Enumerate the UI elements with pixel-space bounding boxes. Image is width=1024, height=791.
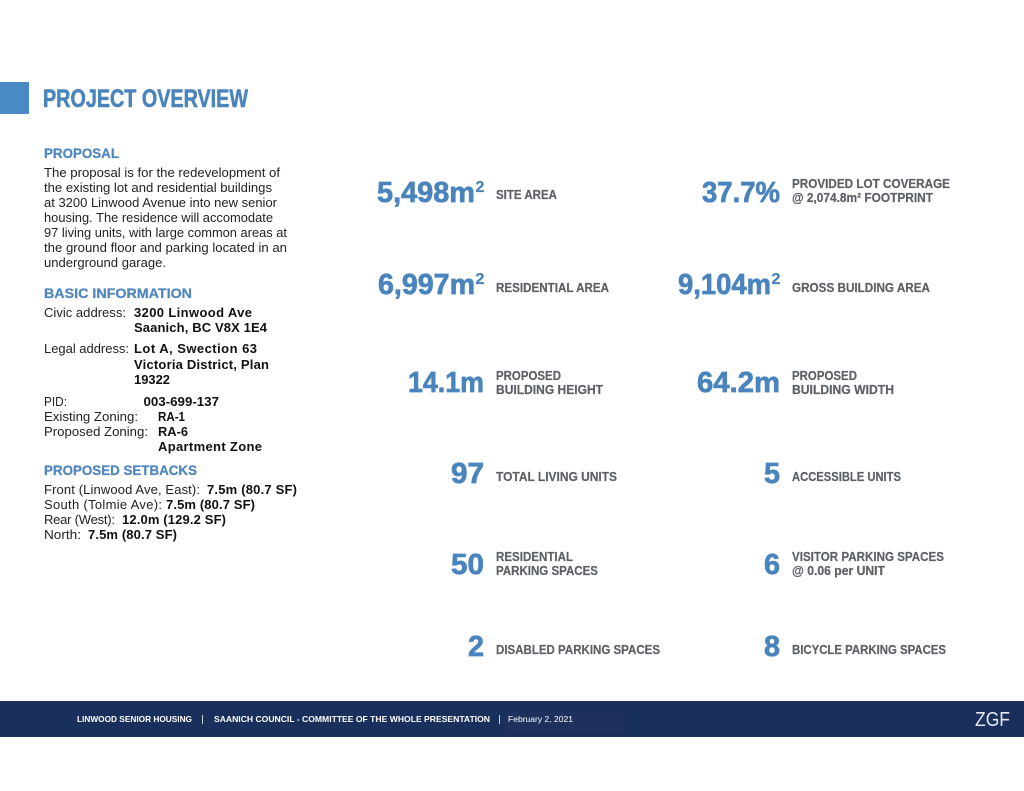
stat: disabled parking	[468, 631, 660, 663]
stat: visitor parking: @ 0.06 per UNIT	[792, 564, 885, 578]
legal address: Victoria District, Plan	[134, 357, 269, 372]
stat: gross building area: GROSS BUILDING AREA	[792, 281, 930, 295]
footer: divider two	[499, 715, 500, 724]
stat: gross building area	[678, 269, 930, 301]
setback: north: North:	[44, 527, 81, 542]
stat: bicycle parking: BICYCLE PARKING SPACES	[792, 643, 946, 657]
proposal text block	[44, 165, 287, 270]
proposal text block: the existing lot and residential buildings	[44, 180, 272, 195]
heading: proposed setbacks: PROPOSED SETBACKS	[44, 462, 197, 478]
stat: gross building area: 2	[772, 271, 780, 288]
proposed zoning: Proposed Zoning:	[44, 424, 148, 439]
stat: bicycle parking: 8	[764, 631, 780, 663]
PID	[44, 394, 219, 409]
stat: lot coverage: PROVIDED LOT COVERAGE	[792, 177, 950, 191]
stat: lot coverage: 37.7%	[702, 177, 780, 209]
existing zoning: RA-1	[158, 409, 185, 424]
stat: site area: 5,498m	[377, 177, 475, 209]
stat: residential area: 2	[476, 271, 484, 288]
stat: lot coverage	[702, 177, 950, 209]
stat: total living units: TOTAL LIVING UNITS	[496, 470, 617, 484]
civic address: Civic address:	[44, 305, 126, 320]
stat: gross building area: 9,104m	[678, 269, 771, 301]
heading: basic information: BASIC INFORMATION	[44, 285, 192, 301]
stat: accessible units: ACCESSIBLE UNITS	[792, 470, 901, 484]
heading: proposal: PROPOSAL	[44, 145, 119, 161]
panel: basic information	[44, 285, 269, 454]
stat: accessible units: 5	[764, 458, 780, 490]
stat: residential parking: RESIDENTIAL	[496, 550, 573, 564]
stat: building height	[408, 367, 603, 399]
legal address	[44, 341, 269, 387]
stat: total living units	[451, 458, 617, 490]
setback: rear: 12.0m (129.2 SF)	[122, 512, 226, 527]
footer: divider one	[202, 715, 203, 724]
footer: presentation name: SAANICH COUNCIL - COMMITTEE OF THE WHOLE PRESENTATION	[214, 714, 490, 724]
setback: rear: Rear (West):	[44, 512, 115, 527]
stat: residential area: 6,997m	[378, 269, 475, 301]
existing zoning	[44, 409, 185, 424]
setback: front: 7.5m (80.7 SF)	[207, 482, 297, 497]
stat: building height: BUILDING HEIGHT	[496, 383, 603, 397]
stat: visitor parking: 6	[764, 549, 780, 581]
civic address: Saanich, BC V8X 1E4	[134, 320, 268, 335]
proposal text block: at 3200 Linwood Avenue into new senior	[44, 195, 278, 210]
setback: south	[44, 497, 255, 512]
proposal text block: underground garage.	[44, 255, 166, 270]
proposal text block: 97 living units, with large common areas at	[44, 225, 287, 240]
proposed zoning: Apartment Zone	[158, 439, 262, 454]
stat: residential parking	[451, 549, 598, 581]
existing zoning: Existing Zoning:	[44, 409, 138, 424]
stat: accessible units	[764, 458, 901, 490]
accent square	[0, 82, 29, 114]
proposed zoning	[44, 424, 262, 454]
stat: lot coverage: @ 2,074.8m² FOOTPRINT	[792, 191, 933, 205]
stat: disabled parking: 2	[468, 631, 484, 663]
proposal text block: the ground floor and parking located in an	[44, 240, 287, 255]
setback: north	[44, 527, 177, 542]
setback: north: 7.5m (80.7 SF)	[88, 527, 177, 542]
civic address: 3200 Linwood Ave	[134, 305, 252, 320]
stat: site area: SITE AREA	[496, 188, 557, 202]
stat: site area: 2	[476, 179, 484, 196]
footer: date: February 2, 2021	[508, 714, 573, 724]
stat: residential parking: PARKING SPACES	[496, 564, 598, 578]
setback: rear	[44, 512, 226, 527]
footer: project name: LINWOOD SENIOR HOUSING	[77, 714, 192, 724]
stat: building width: 64.2m	[697, 367, 780, 399]
stat: visitor parking	[764, 549, 944, 581]
stat: visitor parking: VISITOR PARKING SPACES	[792, 550, 944, 564]
stat: residential area	[378, 269, 609, 301]
footer band	[0, 701, 1024, 737]
stat: building height: 14.1m	[408, 367, 484, 399]
stat: building width: BUILDING WIDTH	[792, 383, 894, 397]
stat: bicycle parking	[764, 631, 946, 663]
legal address: Lot A, Swection 63	[134, 341, 257, 356]
title: PROJECT OVERVIEW	[43, 85, 248, 113]
legal address: Legal address:	[44, 341, 129, 356]
PID: PID:	[44, 394, 67, 409]
setback: front: Front (Linwood Ave, East):	[44, 482, 200, 497]
panel: proposed setbacks	[44, 462, 297, 542]
legal address: 19322	[134, 372, 170, 387]
civic address	[44, 305, 268, 335]
proposal text block: housing. The residence will accomodate	[44, 210, 273, 225]
setback: south: South (Tolmie Ave):	[44, 497, 162, 512]
stat: total living units: 97	[451, 458, 484, 490]
setback: south: 7.5m (80.7 SF)	[166, 497, 255, 512]
PID: 003-699-137	[144, 394, 219, 409]
panel: proposal	[44, 145, 287, 270]
stat: building width: PROPOSED	[792, 369, 857, 383]
stat: site area	[377, 177, 557, 209]
stat: building width	[697, 367, 894, 399]
stat: disabled parking: DISABLED PARKING SPACES	[496, 643, 660, 657]
proposed zoning: RA-6	[158, 424, 188, 439]
setback: front	[44, 482, 297, 497]
stat: building height: PROPOSED	[496, 369, 561, 383]
stat: residential parking: 50	[451, 549, 484, 581]
logo: ZGF: ZGF	[975, 709, 1010, 731]
proposal text block: The proposal is for the redevelopment of	[44, 165, 280, 180]
stat: residential area: RESIDENTIAL AREA	[496, 281, 609, 295]
